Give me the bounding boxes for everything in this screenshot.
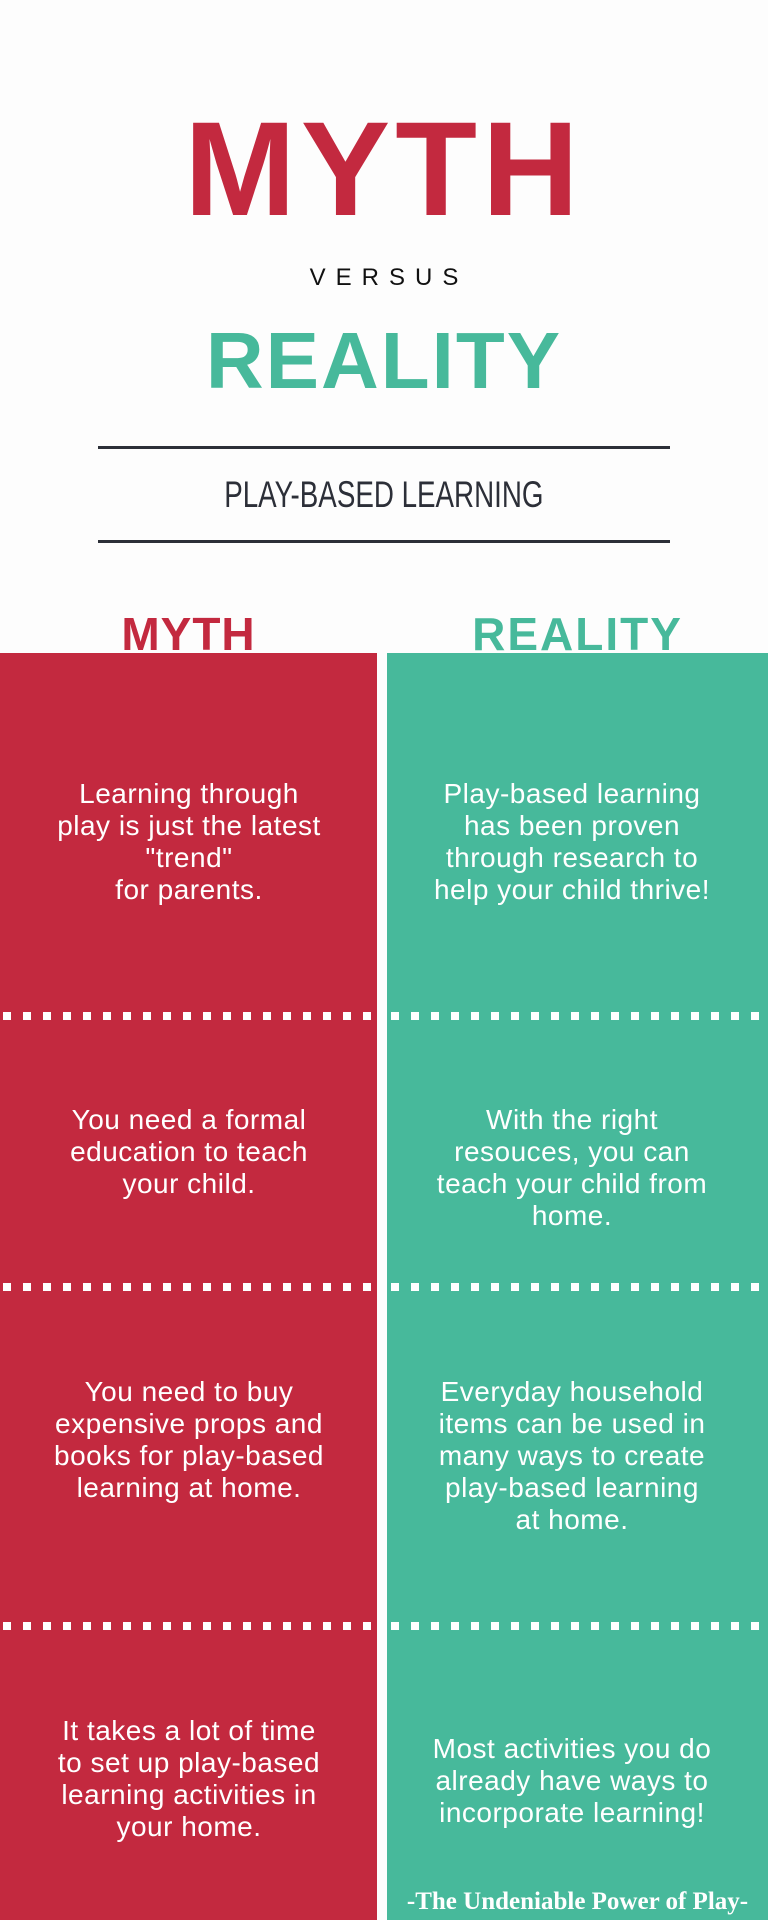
reality 4 text: already have ways to [435, 1765, 709, 1796]
column heading: myth: MYTH [121, 608, 256, 660]
myth 3 text: expensive props and [55, 1408, 323, 1439]
myth 3 text: You need to buy [85, 1376, 293, 1407]
myth 4 text: to set up play-based [58, 1747, 320, 1778]
myth 3 text: books for play-based [54, 1440, 324, 1471]
myth 2 text [70, 1104, 308, 1199]
reality 3 text: at home. [516, 1504, 628, 1535]
reality 1 text [434, 778, 710, 905]
reality 1 text: help your child thrive! [434, 874, 710, 905]
reality 2 text: teach your child from [437, 1168, 707, 1199]
reality 3 text [439, 1376, 705, 1535]
myth 4 text: learning activities in [61, 1779, 317, 1810]
myth 4 text [58, 1715, 320, 1842]
myth 3 text [54, 1376, 324, 1503]
reality 2 text [437, 1104, 707, 1231]
subtitle: versus: VERSUS [310, 264, 468, 291]
myth 1 text: for parents. [115, 874, 263, 905]
subtitle: play-based learning: PLAY-BASED LEARNING [224, 474, 544, 515]
reality 3 text: many ways to create [439, 1440, 705, 1471]
myth 4 text: your home. [116, 1811, 262, 1842]
myth 1 text [57, 778, 321, 905]
reality 1 text: through research to [446, 842, 698, 873]
reality 4 text: Most activities you do [433, 1733, 711, 1764]
column heading: reality: REALITY [472, 608, 683, 660]
panel: myth column [0, 653, 377, 1920]
myth 1 text: Learning through [79, 778, 299, 809]
title: REALITY: REALITY [206, 316, 562, 405]
myth 4 text: It takes a lot of time [62, 1715, 316, 1746]
reality 1 text: Play-based learning [444, 778, 700, 809]
reality 4 text: incorporate learning! [439, 1797, 705, 1828]
reality 3 text: play-based learning [445, 1472, 699, 1503]
reality 3 text: Everyday household [441, 1376, 703, 1407]
myth 1 text: play is just the latest [57, 810, 321, 841]
myth 2 text: You need a formal [72, 1104, 306, 1135]
myth 3 text: learning at home. [77, 1472, 301, 1503]
myth 1 text: "trend" [145, 842, 233, 873]
reality 2 text: resouces, you can [454, 1136, 690, 1167]
title: MYTH: MYTH [184, 95, 584, 244]
myth 2 text: your child. [122, 1168, 256, 1199]
reality 3 text: items can be used in [439, 1408, 705, 1439]
reality 2 text: home. [532, 1200, 612, 1231]
panel: reality column [387, 653, 768, 1920]
reality 2 text: With the right [486, 1104, 658, 1135]
reality 4 text [433, 1733, 711, 1828]
reality 1 text: has been proven [464, 810, 680, 841]
footer credit: -The Undeniable Power of Play- [407, 1888, 748, 1915]
myth 2 text: education to teach [70, 1136, 308, 1167]
